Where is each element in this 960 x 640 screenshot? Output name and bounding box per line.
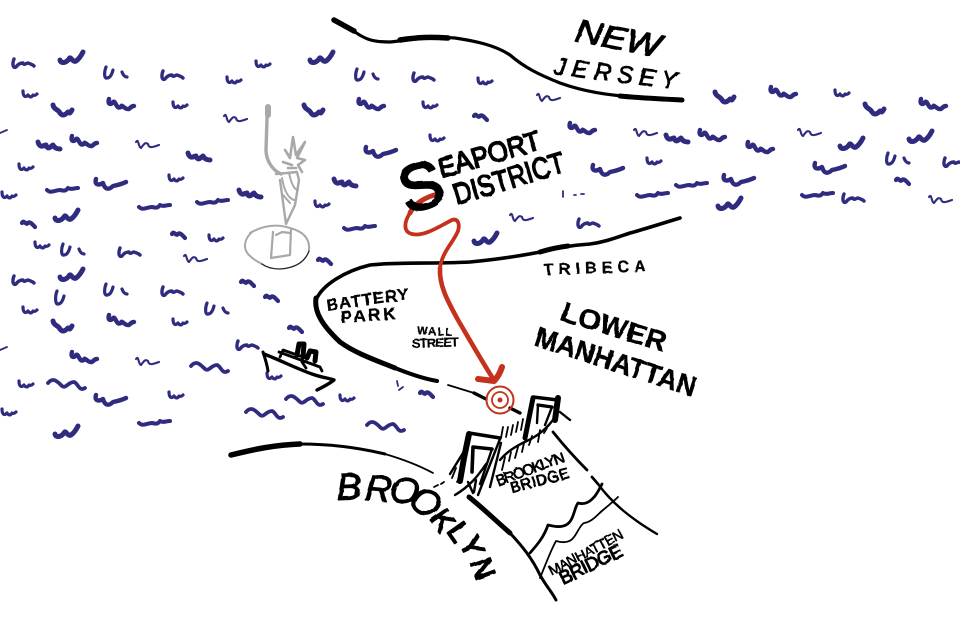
label: Wall Street: STREET bbox=[412, 334, 459, 351]
label: Lower Manhattan: LOWER bbox=[557, 296, 671, 358]
label: Wall Street bbox=[412, 325, 459, 351]
icon: Statue of Liberty bbox=[245, 107, 309, 269]
icon: ferry boat bbox=[263, 344, 334, 390]
label: Seaport District: S bbox=[389, 144, 452, 227]
Brooklyn Bridge towers bbox=[450, 397, 570, 495]
red route arrow bbox=[405, 194, 502, 381]
water waves bbox=[0, 52, 960, 437]
label: Brooklyn Bridge: BROOKLYN bbox=[494, 449, 567, 490]
label: Manhattan Bridge: BRIDGE bbox=[556, 541, 626, 589]
Manhattan Bridge lines bbox=[530, 484, 618, 578]
label: Lower Manhattan: MANHATTAN bbox=[531, 321, 701, 403]
label: Manhattan Bridge: MANHATTEN bbox=[546, 526, 626, 579]
map labels bbox=[325, 13, 701, 589]
label: Brooklyn: BROO bbox=[336, 466, 448, 527]
label: Battery Park: PARK bbox=[340, 304, 397, 327]
label: Seaport District: EAPORT bbox=[435, 125, 544, 184]
label: New Jersey: NEW bbox=[573, 13, 667, 65]
label: New Jersey: JERSEY bbox=[551, 53, 681, 95]
shoreline: Lower Manhattan bbox=[316, 218, 680, 413]
label: Battery Park: BATTERY bbox=[325, 285, 410, 315]
label: Seaport District bbox=[389, 115, 569, 227]
shoreline: New Jersey bbox=[334, 20, 682, 100]
label: Seaport District: DISTRICT bbox=[449, 147, 569, 212]
label: Brooklyn Bridge: BRIDGE bbox=[509, 465, 571, 497]
label: Brooklyn: KLYN bbox=[423, 504, 501, 584]
label: Wall Street: WALL bbox=[417, 325, 453, 339]
label: New Jersey bbox=[551, 13, 681, 95]
label: Tribeca: TRIBECA bbox=[544, 258, 647, 279]
shoreline: Brooklyn bbox=[231, 432, 657, 600]
target marker bbox=[486, 386, 514, 414]
